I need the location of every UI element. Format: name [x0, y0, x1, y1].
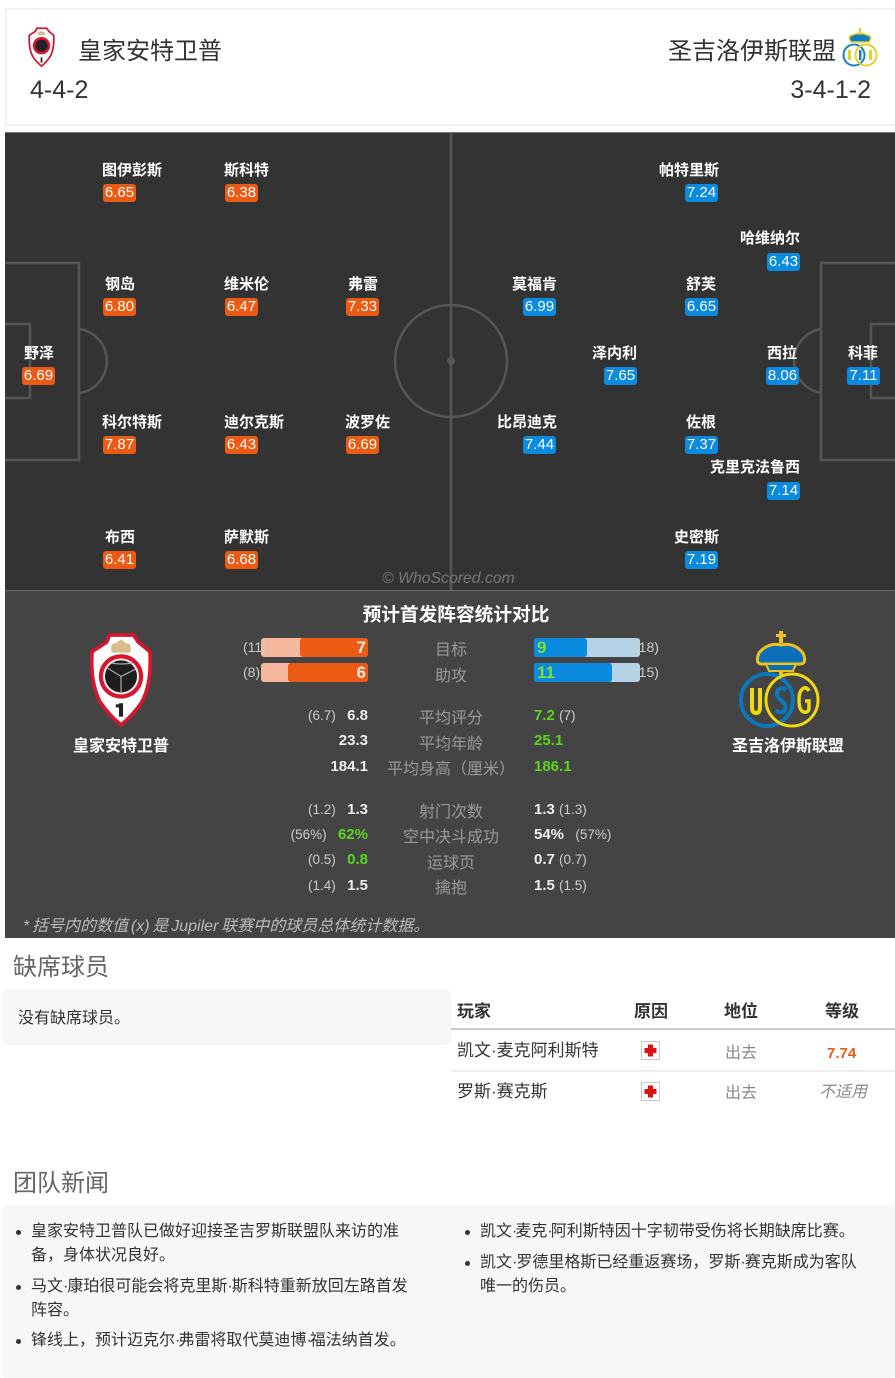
bar: home goals	[243, 638, 368, 657]
table header: 玩家	[457, 1002, 491, 1021]
player: 图伊彭斯	[102, 162, 162, 202]
player: 波罗佐: 波罗佐	[345, 414, 390, 431]
news right 2: 唯一的伤员。	[480, 1278, 576, 1295]
news left 1: 备，身体状况良好。	[31, 1247, 175, 1264]
player: 西拉	[766, 345, 799, 385]
row: 凯文·麦克阿利斯特: 凯文·麦克阿利斯特	[457, 1041, 599, 1060]
away dribbles: 0.7 (0.7)	[534, 851, 587, 868]
player: 莫福肯	[512, 276, 557, 316]
player: 佐根: 佐根	[686, 414, 716, 431]
bar: home goals: 7	[357, 638, 366, 657]
news left 2	[16, 1275, 416, 1323]
icon: USG crest small	[842, 28, 878, 66]
away age: 25.1	[534, 732, 563, 749]
news right 2	[465, 1251, 865, 1299]
player: 斯科特: 斯科特	[224, 162, 269, 179]
player: 迪尔克斯	[224, 414, 284, 454]
label: age: 平均年龄	[419, 736, 483, 753]
home age: 23.3	[339, 732, 368, 749]
player: 比昂迪克: 比昂迪克	[497, 414, 557, 431]
player: 史密斯: 7.19	[687, 551, 716, 568]
player: 布西	[103, 529, 136, 569]
header panel	[5, 8, 895, 126]
table header	[451, 995, 895, 1030]
player: 图伊彭斯: 图伊彭斯	[102, 162, 162, 179]
table header: 地位	[724, 1002, 758, 1021]
icon: Antwerp crest small	[28, 27, 55, 67]
news left 1	[16, 1220, 416, 1268]
icon: injury cross	[641, 1041, 660, 1060]
player: 哈维纳尔: 哈维纳尔	[740, 230, 800, 247]
away shots: 1.3 (1.3)	[534, 801, 587, 818]
player: 弗雷	[346, 276, 379, 316]
player: 野泽: 野泽	[24, 345, 54, 362]
player: 萨默斯: 6.68	[227, 551, 256, 568]
bar: home assists	[243, 663, 368, 682]
player: 帕特里斯: 帕特里斯	[659, 162, 719, 179]
player: 史密斯: 史密斯	[674, 529, 719, 546]
away team label: 圣吉洛伊斯联盟	[732, 738, 844, 755]
label: aerials: 空中决斗成功	[403, 829, 499, 846]
player: 史密斯	[674, 529, 719, 569]
row: 凯文·麦克阿利斯特: 7.74	[827, 1045, 856, 1062]
player: 哈维纳尔: 6.43	[769, 253, 798, 270]
player: 维米伦	[224, 276, 269, 316]
bar: home goals: (11)	[243, 639, 267, 655]
player: 野泽	[22, 345, 55, 385]
watermark: © WhoScored.com	[382, 570, 515, 587]
player: 帕特里斯	[659, 162, 719, 202]
player: 佐根	[685, 414, 718, 454]
player: 波罗佐: 6.69	[348, 436, 377, 453]
bar: away goals	[534, 638, 659, 657]
row: 罗斯·赛克斯: 不适用	[819, 1084, 867, 1101]
panel: team news	[2, 1205, 895, 1378]
icon: USG crest large	[739, 631, 820, 728]
player: 科菲: 7.11	[849, 367, 878, 384]
row: 罗斯·赛克斯: 罗斯·赛克斯	[457, 1082, 548, 1101]
bar: away goals: (18)	[634, 639, 659, 655]
home height: 184.1	[330, 758, 368, 775]
row: 罗斯·赛克斯	[451, 1072, 895, 1110]
row: 凯文·麦克阿利斯特	[451, 1030, 895, 1072]
label: height: 平均身高（厘米）	[387, 761, 515, 778]
icon: Antwerp crest large	[90, 633, 152, 727]
player: 哈维纳尔	[740, 230, 800, 271]
player: 野泽: 6.69	[24, 367, 53, 384]
label: goals: 目标	[435, 642, 467, 659]
player: 科尔特斯: 7.87	[105, 436, 134, 453]
news left 2: 阵容。	[31, 1302, 79, 1319]
label: tackles: 擒抱	[435, 880, 467, 897]
bar: away assists: (15)	[634, 664, 659, 680]
icon: injury cross	[641, 1082, 660, 1101]
player: 科菲	[847, 345, 880, 385]
player: 泽内利: 泽内利	[592, 345, 637, 362]
bar: away goals: 9	[537, 638, 546, 657]
player: 斯科特: 6.38	[227, 184, 256, 201]
home tackles: (1.4) 1.5	[308, 877, 368, 894]
home shots: (1.2) 1.3	[308, 801, 368, 818]
bar: away assists: 11	[537, 663, 555, 682]
news right 1: 凯文·麦克·阿利斯特因十字韧带受伤将长期缺席比赛。	[480, 1223, 855, 1240]
player: 斯科特	[224, 162, 269, 202]
player: 布西: 布西	[105, 529, 135, 546]
footnote: * 括号内的数值 (x) 是 Jupiler 联赛中的球员总体统计数据。	[23, 918, 429, 935]
heading: team news: 团队新闻	[13, 1170, 109, 1197]
player: 科尔特斯: 科尔特斯	[102, 414, 162, 431]
heading: missing players: 缺席球员	[13, 954, 109, 981]
player: 钢岛	[103, 276, 136, 316]
player: 帕特里斯: 7.24	[687, 184, 716, 201]
player: 泽内利: 7.65	[606, 367, 635, 384]
label: assists: 助攻	[435, 668, 467, 685]
player: 布西: 6.41	[105, 551, 134, 568]
player: 西拉: 8.06	[768, 367, 797, 384]
news right 2: 凯文·罗德里格斯已经重返赛场，罗斯·赛克斯成为客队	[480, 1254, 857, 1271]
player: 图伊彭斯: 6.65	[105, 184, 134, 201]
home formation: 4-4-2	[30, 76, 88, 104]
row: 罗斯·赛克斯: 出去	[725, 1085, 757, 1102]
player: 迪尔克斯: 迪尔克斯	[224, 414, 284, 431]
pitch markings	[5, 133, 895, 590]
player: 西拉: 西拉	[767, 345, 797, 362]
table header: 原因	[634, 1002, 668, 1021]
player: 比昂迪克: 7.44	[525, 436, 554, 453]
player: 科尔特斯	[102, 414, 162, 454]
away aerials: 54% (57%)	[534, 826, 611, 843]
player: 钢岛: 钢岛	[105, 276, 135, 293]
player: 比昂迪克	[497, 414, 557, 454]
player: 克里克法鲁西	[710, 459, 800, 500]
player: 萨默斯	[224, 529, 269, 569]
panel: no missing players	[2, 989, 451, 1045]
bar: away assists	[534, 663, 659, 682]
panel: starting lineup stats comparison	[5, 590, 895, 938]
player: 克里克法鲁西: 克里克法鲁西	[710, 459, 800, 476]
player: 波罗佐	[345, 414, 390, 454]
player: 莫福肯: 6.99	[525, 298, 554, 315]
panel: no missing players: 没有缺席球员。	[18, 1010, 130, 1027]
home team name: 皇家安特卫普	[78, 38, 222, 65]
player: 克里克法鲁西: 7.14	[769, 482, 798, 499]
news left 3	[16, 1329, 416, 1353]
player: 舒芙	[685, 276, 718, 316]
player: 舒芙: 6.65	[687, 298, 716, 315]
bar: home assists: 6	[357, 663, 366, 682]
player: 泽内利	[592, 345, 637, 385]
news left 3: 锋线上，预计迈克尔·弗雷将取代莫迪博·福法纳首发。	[31, 1332, 406, 1349]
player: 维米伦: 6.47	[227, 298, 256, 315]
player: 迪尔克斯: 6.43	[227, 436, 256, 453]
home rating: (6.7) 6.8	[308, 707, 368, 724]
player: 科菲: 科菲	[848, 345, 878, 362]
home aerials: (56%) 62%	[291, 826, 368, 843]
news left 1: 皇家安特卫普队已做好迎接圣吉罗斯联盟队来访的准	[31, 1223, 399, 1240]
player: 弗雷: 弗雷	[348, 276, 378, 293]
player: 维米伦: 维米伦	[224, 276, 269, 293]
player: 弗雷: 7.33	[348, 298, 377, 315]
player: 萨默斯: 萨默斯	[224, 529, 269, 546]
label: dribbles: 运球页	[427, 855, 475, 872]
panel: pitch	[5, 132, 895, 590]
label: rating: 平均评分	[419, 710, 483, 727]
away tackles: 1.5 (1.5)	[534, 877, 587, 894]
player: 钢岛: 6.80	[105, 298, 134, 315]
table header: 等级	[825, 1002, 859, 1021]
away team name: 圣吉洛伊斯联盟	[668, 38, 836, 65]
away rating: 7.2 (7)	[534, 707, 576, 724]
home team label: 皇家安特卫普	[73, 738, 169, 755]
player: 舒芙: 舒芙	[686, 276, 716, 293]
home dribbles: (0.5) 0.8	[308, 851, 368, 868]
bar: home assists: (8)	[243, 664, 260, 680]
player: 莫福肯: 莫福肯	[512, 276, 557, 293]
away formation: 3-4-1-2	[790, 76, 871, 104]
stats heading: 预计首发阵容统计对比	[363, 604, 549, 625]
player: 佐根: 7.37	[687, 436, 716, 453]
row: 凯文·麦克阿利斯特: 出去	[725, 1045, 757, 1062]
away height: 186.1	[534, 758, 572, 775]
label: shots: 射门次数	[419, 804, 483, 821]
news right 1	[465, 1220, 865, 1244]
news left 2: 马文·康珀很可能会将克里斯·斯科特重新放回左路首发	[31, 1278, 408, 1295]
table: missing players	[451, 995, 895, 1110]
